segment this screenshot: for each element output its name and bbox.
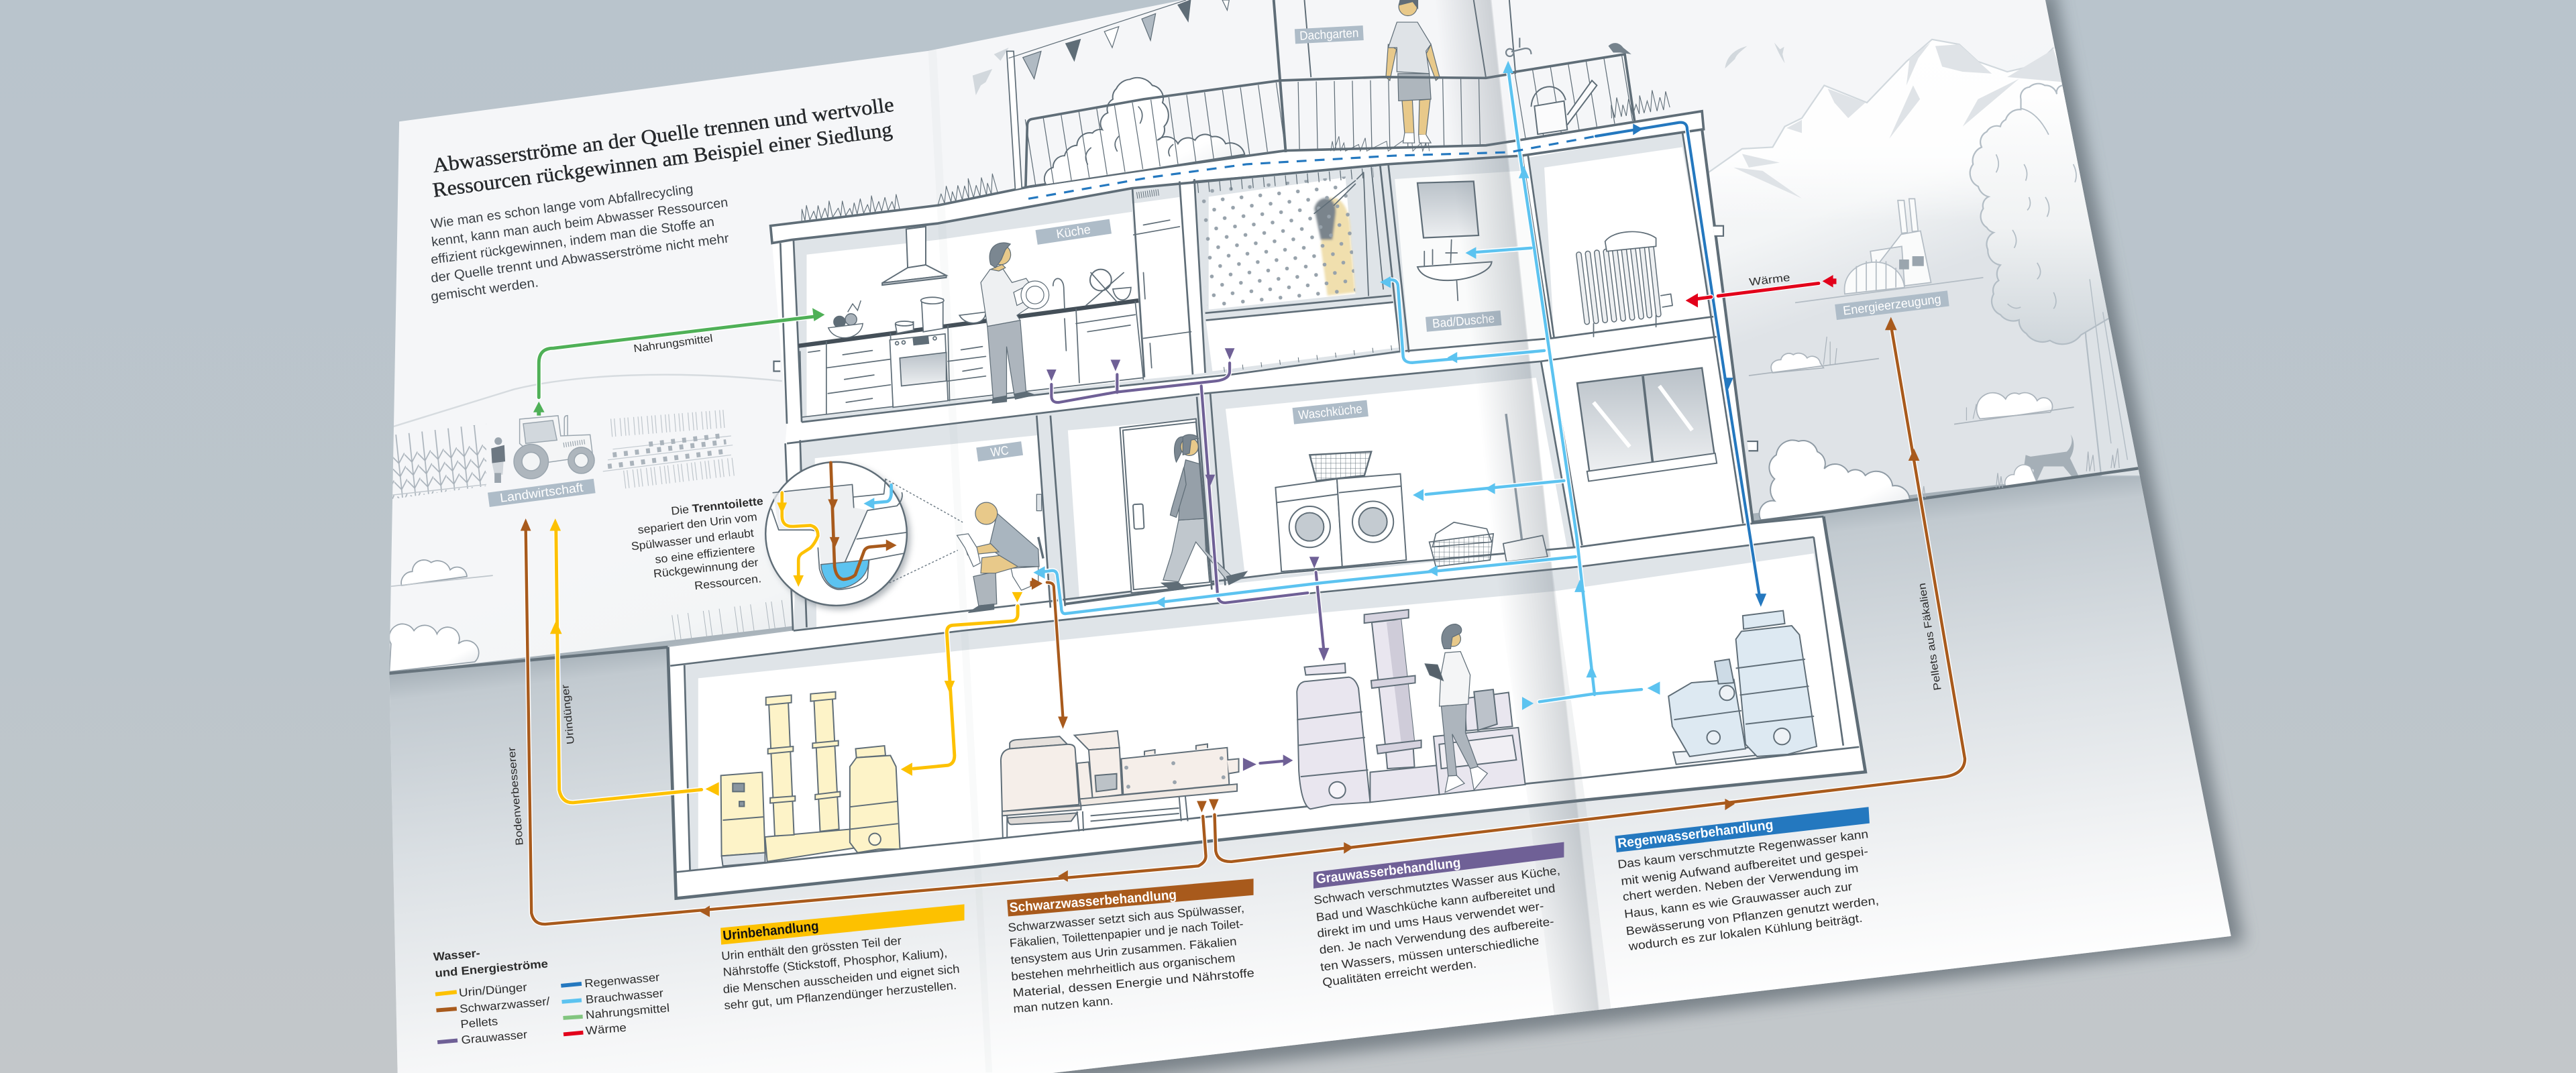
water trap [821, 560, 869, 588]
Grauwasser text: Bad und Waschküche kann aufbereitet und [1316, 881, 1556, 924]
house body [668, 129, 1866, 899]
oven [890, 334, 948, 407]
ground tufts right [1922, 449, 2119, 498]
Küche label: Küche [1055, 222, 1091, 241]
basement floor line [676, 747, 1859, 872]
panel: Urinbehandlung [720, 904, 965, 1012]
Grauwasser heading bar [1313, 842, 1564, 889]
laundry room [1226, 378, 1567, 578]
fridge column [1132, 197, 1193, 380]
field grass [611, 418, 736, 479]
legend labels: Schwarzwasser/ [459, 995, 550, 1015]
flow: Schwarzwasser brown [521, 317, 1965, 924]
legend [433, 946, 670, 1047]
bath room [1395, 171, 1551, 350]
panel: Schwarzwasserbehandlung [1007, 879, 1255, 1015]
Regenwasser text: Haus, kann es wie Grauwasser auch zur [1623, 879, 1853, 921]
treatment desk [1434, 689, 1525, 795]
basement room [698, 553, 1843, 872]
Urinbehandlung text: sehr gut, um Pflanzendünger herzustellen. [724, 978, 957, 1012]
legend labels: Wärme [585, 1021, 627, 1037]
kitchen [798, 192, 1191, 417]
Trenntoilette note: Die Trenntoilette [670, 494, 764, 518]
Schwarzwasser text: man nutzen kann. [1013, 994, 1114, 1015]
railing bars [1030, 87, 1629, 153]
Trenntoilette note: so eine effizientere [654, 542, 756, 566]
walking woman [1161, 435, 1247, 590]
legend labels [458, 970, 670, 1047]
Grauwasser text: ten Wassers, müssen unterschiedliche [1320, 934, 1540, 974]
technician woman [1425, 624, 1487, 792]
drawer handles [808, 220, 1170, 402]
paper shadow [985, 0, 2244, 1073]
ground line under maize [391, 484, 486, 495]
radiator [1578, 231, 1672, 337]
basin tap [1424, 240, 1457, 266]
fold shading [1434, 0, 1618, 1068]
energy plant [1795, 199, 1983, 302]
birds [973, 43, 1785, 95]
Pellets flow label: Pellets aus Fäkalien [1917, 582, 1944, 691]
hallway room [1068, 418, 1211, 598]
forearm [966, 544, 999, 555]
thigh [981, 555, 1018, 573]
Schwarzwasser text: Schwarzwasser setzt sich aus Spülwasser, [1008, 901, 1245, 934]
lower-left bushes [389, 560, 479, 672]
Küche label [1036, 219, 1112, 245]
legend labels: Urin/Dünger [458, 980, 528, 999]
roof-top bushes [1030, 78, 1244, 187]
rainwater tanks [1668, 611, 1817, 765]
Regenwasser text: wodurch es zur lokalen Kühlung beiträgt. [1627, 911, 1863, 953]
Bodenverbesserer flow label: Bodenverbesserer [506, 746, 526, 846]
panel: Regenwasserbehandlung [1615, 807, 1880, 953]
tractor [514, 416, 594, 479]
legend labels: Pellets [460, 1014, 498, 1031]
cooker hood [882, 227, 947, 285]
crop rows [603, 436, 733, 471]
tree [1970, 84, 2152, 476]
tile line [1224, 347, 1397, 370]
crop seedlings [608, 435, 726, 467]
ground lines left [391, 575, 493, 586]
legend title [433, 946, 549, 980]
upper grey wall shading [794, 156, 1551, 422]
newspaper [957, 534, 980, 567]
window room [1554, 337, 1743, 544]
Nahrungsmittel flow label: Nahrungsmittel [633, 333, 714, 355]
shirt [989, 514, 1039, 567]
Schwarzwasser text: tensystem aus Urin zusammen. Fäkalien [1010, 934, 1237, 967]
toilet bowl [1011, 567, 1038, 590]
Regenwasser heading bar [1615, 807, 1870, 852]
Urinbehandlung text: Urin enthält den grössten Teil der [720, 934, 902, 963]
background hill [381, 375, 782, 431]
Urinbehandlung text: Nährstoffe (Stickstoff, Phosphor, Kalium), [722, 946, 948, 979]
Grauwasser text: Qualitäten erreicht werden. [1322, 957, 1477, 989]
WC room [815, 435, 1051, 629]
shower head and rail [1314, 168, 1383, 296]
trousers [1163, 518, 1232, 581]
fridge vent [1137, 192, 1160, 195]
legend labels: Brauchwasser [585, 986, 664, 1006]
garden wall thin lines [1304, 0, 1515, 78]
WC label [976, 441, 1023, 461]
Schwarzwasser heading bar [1007, 879, 1254, 917]
lens circle [765, 462, 907, 606]
panel: Grauwasserbehandlung [1313, 842, 1564, 989]
blackwater press [1001, 731, 1239, 838]
intro text: gemischt werden. [430, 275, 539, 304]
Schwarzwasser heading bar: Schwarzwasserbehandlung [1009, 888, 1177, 915]
toilet to press brown line [1047, 582, 1063, 718]
arm [1170, 467, 1186, 517]
Schwarzwasser text: Fäkalien, Toilettenpapier und je nach Toilet- [1009, 917, 1244, 950]
Trenntoilette note [631, 494, 764, 592]
Energieerzeugung label: Energieerzeugung [1842, 292, 1941, 318]
shower curtain [1209, 177, 1355, 310]
Urinbehandlung heading bar [720, 904, 965, 945]
Grauwasser text: Schwach verschmutztes Wasser aus Küche, [1313, 863, 1561, 907]
Grauwasser heading bar: Grauwasserbehandlung [1316, 856, 1461, 887]
underground area [389, 465, 2300, 1073]
Regenwasser text: chert werden. Neben der Verwendung im [1622, 861, 1859, 903]
terrace bottom grass [1331, 135, 1430, 151]
intro text [430, 182, 730, 304]
washing machines [1275, 474, 1406, 571]
intro text: kennt, kann man auch beim Abwasser Ressourcen [431, 195, 729, 249]
legend labels: Regenwasser [584, 970, 660, 990]
Regenwasser text: Das kaum verschmutzte Regenwasser kann [1617, 827, 1869, 871]
hair [1183, 435, 1199, 455]
farmer [491, 437, 505, 483]
mountains [1709, 39, 2084, 199]
flag pole [1007, 51, 1022, 190]
Regenwasser text: Bewässerung von Pflanzen genutzt werden, [1625, 893, 1880, 938]
window [1577, 368, 1717, 482]
head [1181, 438, 1198, 455]
cat [2024, 435, 2079, 482]
shower [1193, 166, 1397, 370]
basin drain [1457, 281, 1458, 300]
bushes beside house [1760, 440, 1910, 520]
basement outer wall [668, 516, 1866, 899]
shoes [1161, 571, 1247, 590]
terrace grass [1608, 88, 1670, 118]
bathroom [1417, 181, 1501, 332]
Schwarzwasser text [1008, 901, 1255, 1015]
lower shower wall [1206, 302, 1400, 371]
bunting [1009, 0, 1229, 79]
flow: Regenwasser dark blue [1028, 123, 1766, 607]
watering can [1531, 80, 1597, 134]
legend swatches [435, 984, 583, 1042]
wall strip [1179, 179, 1205, 374]
toilet bowl section [771, 479, 906, 589]
house building [668, 111, 1866, 899]
landscape labels [488, 290, 1949, 507]
pots [896, 288, 1131, 333]
Dachgarten person [1386, 0, 1440, 143]
legend title: und Energieströme [435, 956, 549, 980]
roof grass [800, 174, 998, 221]
intro text: der Quelle trennt und Abwasserströme nicht mehr [430, 231, 730, 286]
Urinbehandlung text: die Menschen ausscheiden und eignet sich [722, 962, 960, 996]
top [1179, 460, 1204, 520]
title: Abwasserströme an der Quelle trennen und wertvolle [431, 93, 895, 177]
countertop [798, 300, 1138, 346]
radiator room [1544, 147, 1711, 338]
lens shadow [769, 465, 910, 610]
Grauwasser text: den. Je nach Verwendung des aufbereite- [1319, 915, 1555, 956]
maize field [391, 424, 486, 499]
washer basket [1309, 451, 1371, 481]
bowl shading [773, 484, 867, 566]
WC person [957, 502, 1043, 612]
WC label: WC [989, 443, 1010, 459]
intro text: Wie man es schon lange vom Abfallrecycling [430, 182, 694, 231]
lens flush line [863, 485, 892, 509]
trousers at ankles [973, 571, 997, 606]
shoe [968, 604, 994, 612]
showering figure [1314, 198, 1355, 296]
broom [1503, 414, 1548, 562]
railing top rail [1026, 54, 1635, 187]
Landwirtschaft label [488, 479, 596, 507]
faucet and rack [1053, 273, 1124, 308]
washbasin [1417, 262, 1492, 280]
laundry room equipment [1275, 400, 1548, 571]
kitchen room [806, 212, 1143, 417]
grass on ground line [674, 612, 794, 629]
agriculture scene [391, 416, 736, 499]
Schwarzwasser text: Material, dessen Energie und Nährstoffe [1012, 966, 1255, 1000]
flow: Nahrungsmittel green [533, 308, 824, 416]
curtain dots [1196, 176, 1355, 310]
head [975, 502, 998, 524]
roof terrace [1007, 0, 1635, 190]
mirror [1417, 181, 1479, 238]
cabinets [800, 227, 1191, 417]
legend labels: Grauwasser [461, 1027, 528, 1047]
intro text: effizient rückgewinnen, indem man die Stoffe an [430, 215, 715, 268]
Trenntoilette note: separiert den Urin vom [637, 510, 758, 536]
Regenwasser heading bar: Regenwasserbehandlung [1617, 817, 1774, 851]
Dachgarten label: Dachgarten [1299, 25, 1359, 43]
Trenntoilette note: Ressourcen. [694, 572, 762, 592]
Bad/Dusche label: Bad/Dusche [1432, 311, 1495, 331]
Urinbehandlung text [720, 934, 960, 1012]
Trenntoilette note: Rückgewinnung der [653, 556, 759, 580]
brochure paper [389, 0, 2231, 1073]
flow: Wärme red [1686, 275, 1836, 307]
toilet lid [1038, 537, 1043, 559]
lens urine line [777, 493, 818, 587]
Grauwasser text: direkt im und ums Haus verwendet wer- [1316, 899, 1545, 940]
centre fold highlight [928, 49, 992, 1072]
garden wall [1274, 0, 1286, 152]
wall brackets [773, 226, 1758, 451]
WC wall plate [1036, 494, 1042, 511]
Grauwasser text [1313, 863, 1561, 989]
detail lens: separating toilet [765, 462, 963, 610]
flow: Urin yellow [549, 518, 1022, 803]
plates [1090, 270, 1112, 290]
title: Ressourcen rückgewinnen am Beispiel einer Siedlung [431, 118, 894, 202]
bush interior lines [1085, 107, 1173, 164]
structural wall lines [670, 129, 1843, 870]
lens guide lines [882, 479, 963, 586]
Urindünger flow label: Urindünger [559, 684, 577, 745]
Regenwasser text [1617, 827, 1880, 953]
curtain hooks [1197, 172, 1373, 188]
flow: Brauchwasser light blue [1033, 61, 1660, 710]
cook person [981, 243, 1049, 403]
laundry basket [1430, 522, 1493, 567]
small bird [1609, 43, 1631, 54]
Urinbehandlung heading bar: Urinbehandlung [722, 919, 820, 944]
distant bushes [1749, 337, 2074, 425]
door [1120, 418, 1212, 593]
flow: Grauwasser purple [1046, 348, 1329, 771]
Wärme flow label: Wärme [1748, 272, 1790, 288]
Landwirtschaft label: Landwirtschaft [499, 480, 584, 505]
roof slab [771, 111, 1704, 243]
Trenntoilette note: Spülwasser und erlaubt [631, 526, 755, 553]
ground line [389, 467, 2152, 673]
legend labels: Nahrungsmittel [585, 1001, 670, 1021]
garden tap [1506, 38, 1531, 56]
fruit bowl [828, 300, 863, 338]
urine treatment plant [721, 692, 900, 866]
Schwarzwasser text: bestehen mehrheitlich aus organischem [1010, 951, 1236, 983]
greywater treatment [1297, 610, 1440, 809]
Regenwasser text: mit wenig Aufwand aufbereitet und gespei- [1620, 844, 1869, 888]
legend title: Wasser- [433, 946, 481, 964]
lens blackwater line [828, 463, 897, 579]
Waschküche label: Waschküche [1297, 402, 1363, 422]
curtain rail [1193, 166, 1377, 181]
ponytail [1175, 437, 1185, 462]
small bush by cat [2005, 465, 2037, 486]
